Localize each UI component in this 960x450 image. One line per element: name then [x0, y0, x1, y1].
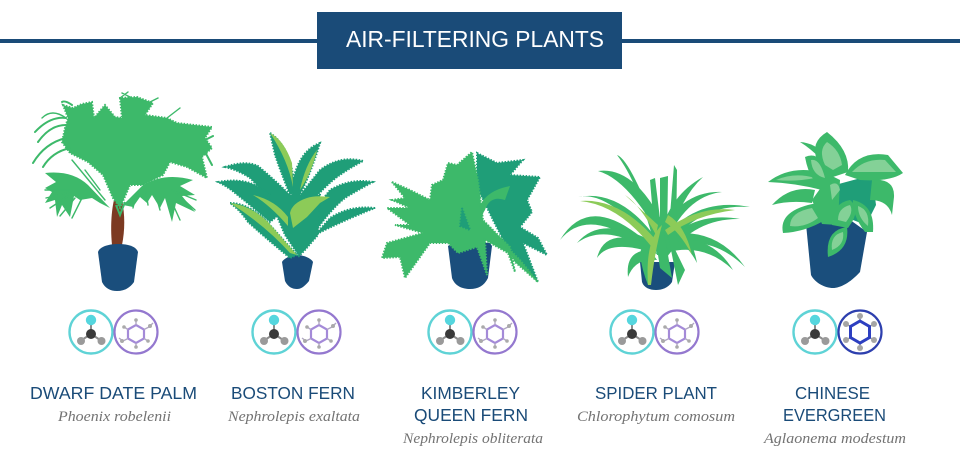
- label: chinese evergreen: EVERGREEN: [783, 405, 886, 425]
- label: dwarf date palm: Phoenix robelenii: [57, 409, 171, 425]
- label: kimberley queen fern: QUEEN FERN: [414, 405, 528, 425]
- label: boston fern: BOSTON FERN: [231, 383, 355, 403]
- icons: spider plant toxins: [610, 310, 698, 354]
- plant: boston fern: [218, 133, 375, 289]
- label: dwarf date palm: DWARF DATE PALM: [30, 383, 197, 403]
- plant: spider plant: [560, 155, 750, 290]
- plant: chinese evergreen: [768, 132, 903, 288]
- label: kimberley queen fern: Nephrolepis obliterata: [402, 431, 543, 447]
- label: dwarf date palm: [30, 383, 197, 425]
- title band: [0, 12, 960, 69]
- plant: dwarf date palm: [33, 92, 213, 291]
- plant: kimberley queen fern: [382, 152, 547, 289]
- label: chinese evergreen: [763, 383, 906, 447]
- icons: chinese evergreen toxins: [794, 310, 882, 354]
- label: boston fern: [227, 383, 360, 425]
- label: kimberley queen fern: KIMBERLEY: [421, 383, 520, 403]
- icons: boston fern toxins: [252, 310, 340, 354]
- label: spider plant: SPIDER PLANT: [595, 383, 717, 403]
- label: spider plant: Chlorophytum comosum: [577, 409, 735, 425]
- icons: dwarf date palm toxins: [70, 310, 158, 354]
- label: spider plant: [577, 383, 735, 425]
- label: kimberley queen fern: [402, 383, 543, 447]
- title band: AIR-FILTERING PLANTS: [346, 26, 604, 52]
- label: chinese evergreen: CHINESE: [795, 383, 870, 403]
- icons: kimberley queen fern toxins: [428, 310, 516, 354]
- label: chinese evergreen: Aglaonema modestum: [763, 431, 906, 447]
- label: boston fern: Nephrolepis exaltata: [227, 409, 360, 425]
